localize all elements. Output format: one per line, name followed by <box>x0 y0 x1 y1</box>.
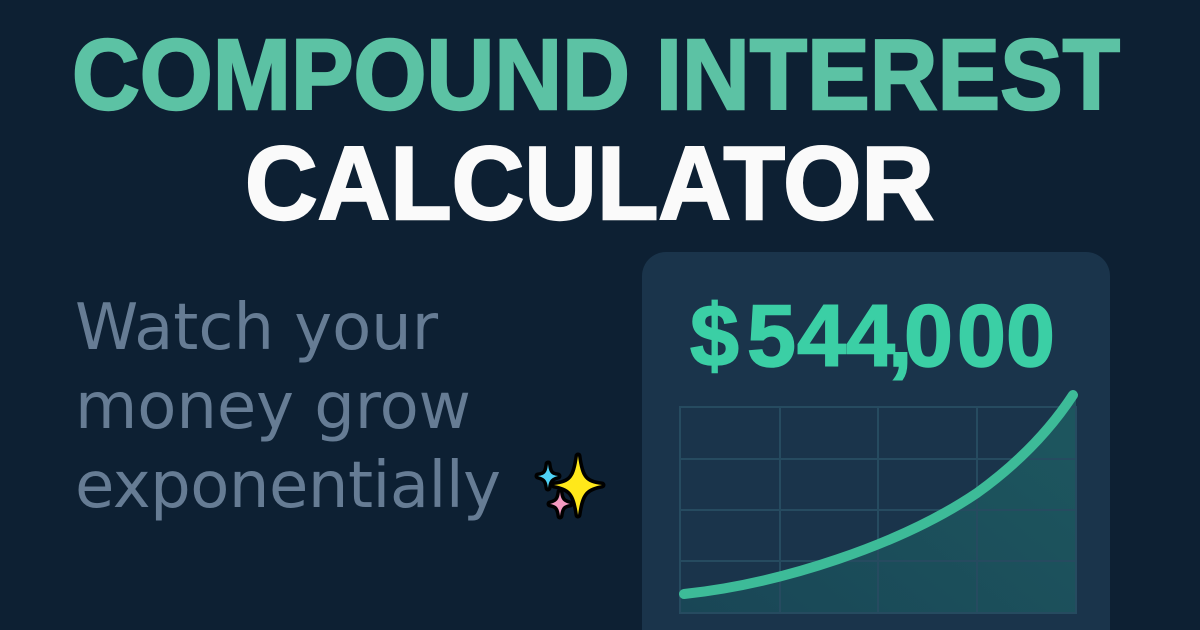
icon: sparkles <box>538 456 602 516</box>
title: Calculator: CALCULATOR <box>245 126 934 242</box>
panel: result card <box>642 252 1110 630</box>
chart: exponential growth curve <box>680 395 1076 613</box>
tagline text: Watch your <box>75 291 439 365</box>
amount: $544,000: $544,000 <box>690 286 1055 385</box>
tagline text <box>75 291 501 523</box>
growth line <box>684 395 1073 594</box>
tagline text: money grow <box>75 370 471 444</box>
title: Compound Interest: COMPOUND INTEREST <box>72 19 1120 131</box>
area under curve <box>680 397 1076 613</box>
tagline text: exponentially <box>75 449 501 523</box>
